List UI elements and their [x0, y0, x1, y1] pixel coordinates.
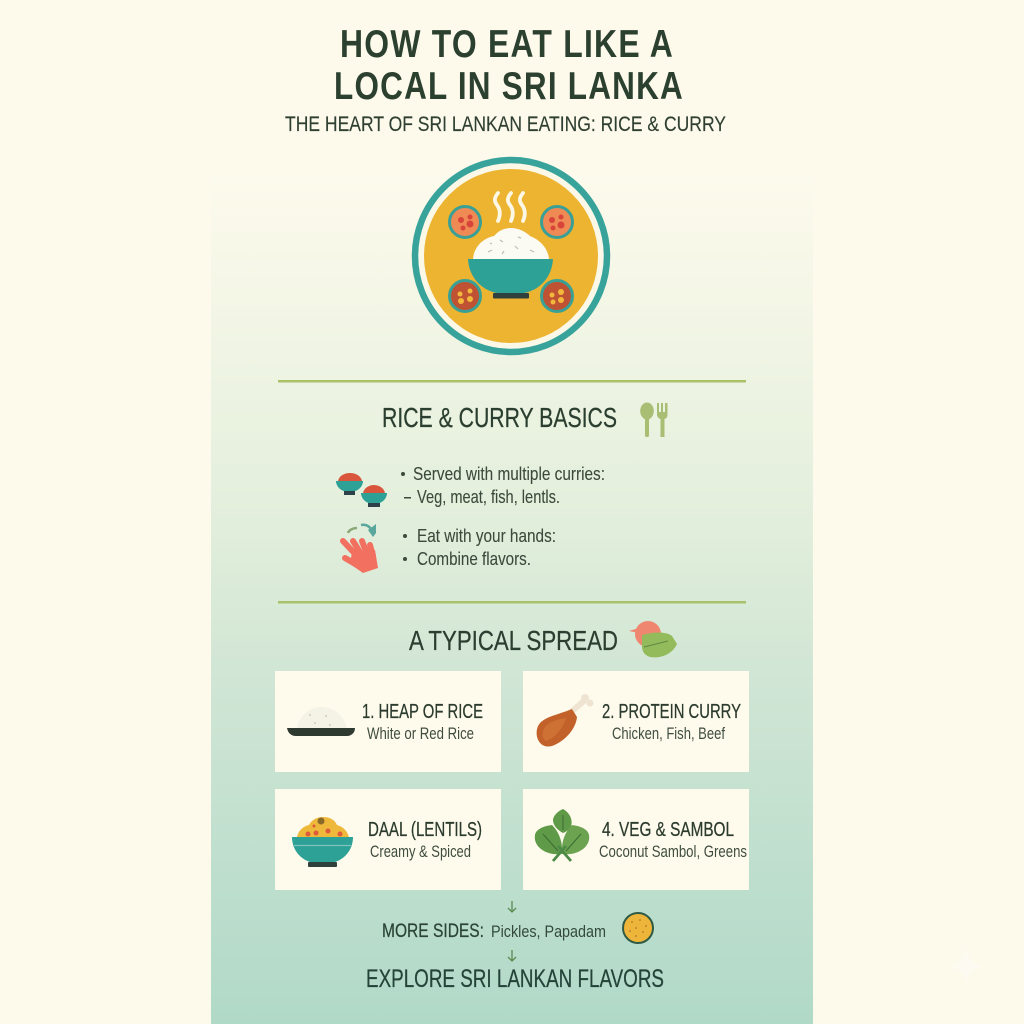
icon: rice bowl with curries badge [415, 160, 607, 352]
text: eat with your hands [403, 526, 556, 569]
card: protein curry: 2. PROTEIN CURRY [602, 701, 741, 723]
closing call to action: EXPLORE SRI LANKAN FLAVORS [366, 965, 664, 993]
card: daal: Creamy & Spiced [370, 842, 471, 861]
icon: daal bowl [292, 817, 353, 867]
card: protein curry: Chicken, Fish, Beef [612, 724, 725, 743]
card: heap of rice: 1. HEAP OF RICE [362, 701, 483, 723]
card: protein curry [523, 671, 749, 772]
text: served with multiple curries: Served with multiple curries: [413, 464, 605, 484]
divider [278, 380, 746, 382]
icon: spoon and fork [640, 402, 668, 437]
icon: leaf and chili [629, 621, 677, 657]
text: served with multiple curries: Veg, meat, fish, lentls. [417, 487, 560, 507]
background panel [211, 170, 813, 1024]
title [334, 23, 684, 108]
card: veg and sambol: 4. VEG & SAMBOL [602, 819, 734, 841]
text: served with multiple curries [401, 464, 605, 507]
more sides line: Pickles, Papadam [491, 922, 606, 941]
title: LOCAL IN SRI LANKA [334, 65, 684, 108]
card: heap of rice: White or Red Rice [367, 724, 474, 743]
arrow [508, 901, 516, 912]
steam [495, 193, 525, 221]
card: daal [275, 789, 501, 890]
icon: papadam [623, 913, 653, 943]
text: eat with your hands: Combine flavors. [417, 549, 531, 569]
card: veg and sambol: Coconut Sambol, Greens [599, 842, 747, 861]
title: HOW TO EAT LIKE A [340, 23, 674, 66]
more sides line: MORE SIDES: [382, 921, 484, 942]
icon: chicken drumstick [537, 694, 594, 747]
icon: curry bowls [336, 473, 387, 507]
rice [473, 228, 549, 259]
heading: a typical spread: A TYPICAL SPREAD [409, 625, 618, 656]
more sides line [382, 921, 606, 942]
divider [278, 601, 746, 604]
watermark sparkle [948, 948, 984, 984]
card: daal: DAAL (LENTILS) [368, 819, 482, 841]
subtitle: THE HEART OF SRI LANKAN EATING: RICE & CURRY [285, 113, 726, 136]
icon: green leaves [535, 809, 589, 861]
heading: rice and curry basics: RICE & CURRY BASICS [382, 402, 617, 433]
curry dishes [450, 206, 572, 312]
text: eat with your hands: Eat with your hands: [417, 526, 556, 546]
arrow [508, 950, 516, 961]
icon: hand mixing food [343, 524, 378, 573]
bowl [468, 259, 553, 293]
card: veg and sambol [523, 789, 749, 890]
icon: rice plate [287, 707, 355, 736]
card: heap of rice [275, 671, 501, 772]
